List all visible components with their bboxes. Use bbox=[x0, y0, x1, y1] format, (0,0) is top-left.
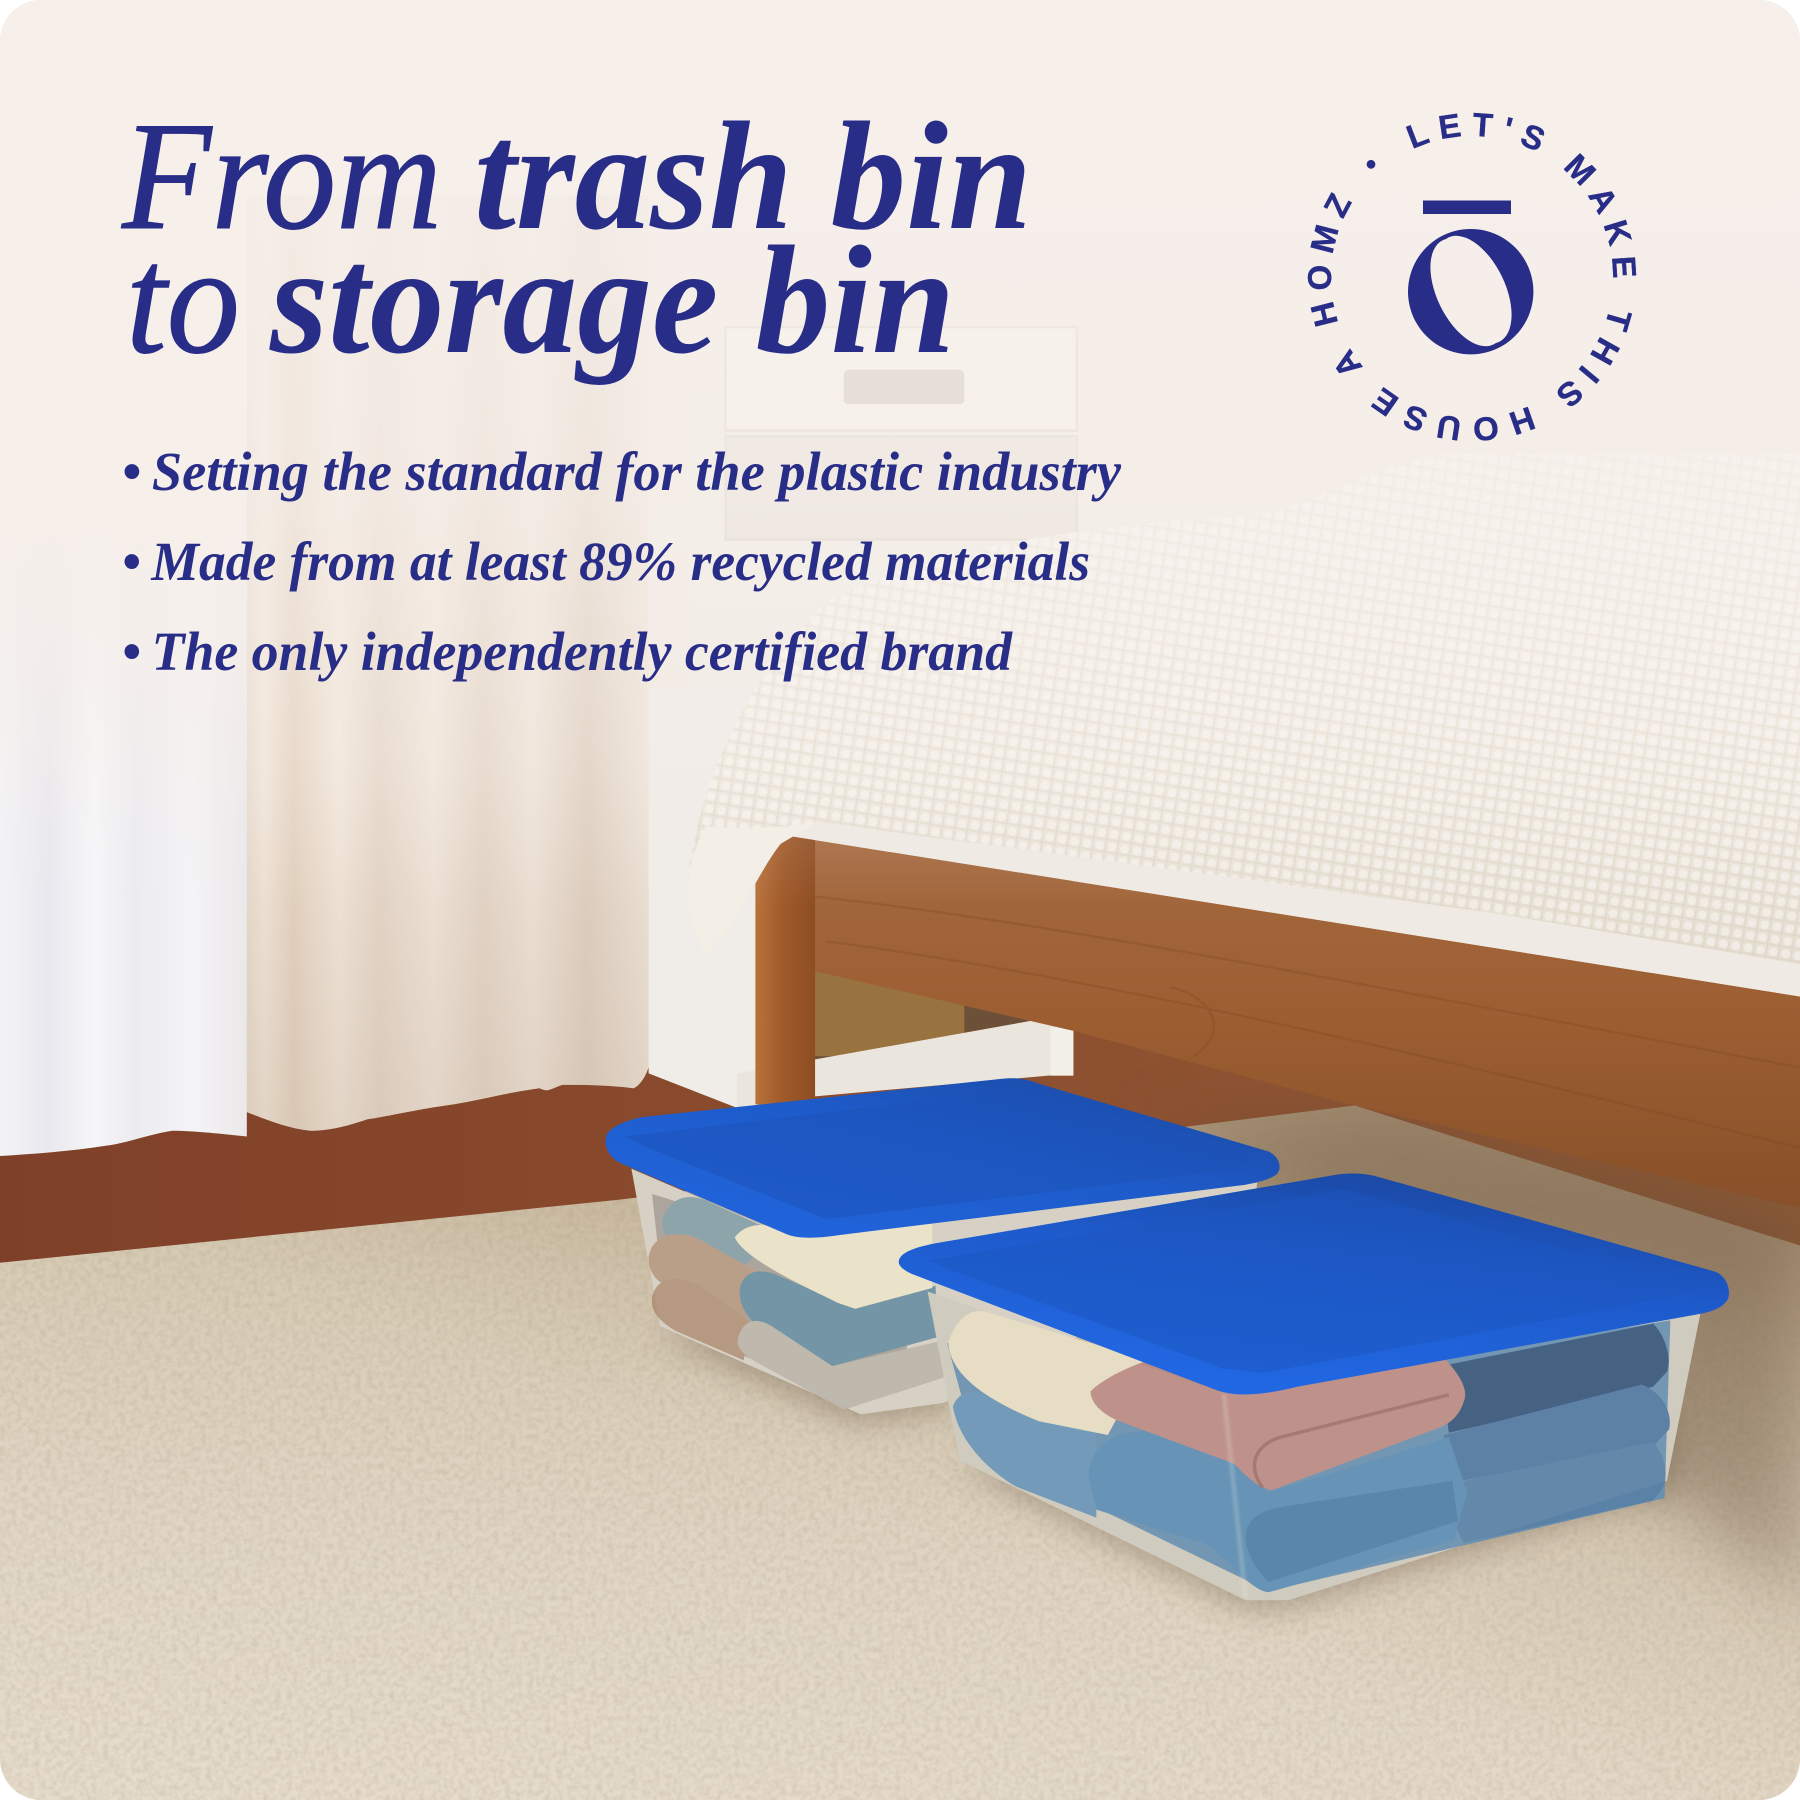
wood floor bbox=[0, 1030, 1800, 1263]
front storage bin bbox=[899, 1173, 1729, 1600]
rear bin frosted front bbox=[740, 1272, 936, 1366]
front bin lid bbox=[899, 1173, 1729, 1394]
main heading: to bbox=[126, 214, 240, 386]
rear bin body bbox=[631, 1169, 1257, 1414]
bullet: plastic industry standard: • Setting the standard for the plastic industry bbox=[122, 441, 1122, 502]
logo mark: macron bar bbox=[1423, 200, 1511, 214]
front bin clothes bbox=[947, 1311, 1670, 1592]
left side fade over sheer curtain bbox=[0, 0, 247, 827]
feature bullet list bbox=[122, 441, 1122, 682]
logo mark: tilted O bbox=[1408, 229, 1533, 354]
knit blanket bbox=[687, 532, 1800, 964]
bullet: certified brand: • The only independently certified brand bbox=[122, 621, 1013, 682]
solid top band bbox=[0, 0, 1800, 195]
bin shadows bbox=[654, 1320, 1676, 1607]
rear bin lid bbox=[606, 1078, 1280, 1238]
top fade overlay bbox=[247, 195, 1800, 878]
main heading: From bbox=[121, 90, 442, 262]
front bin frosted front bbox=[928, 1292, 1701, 1600]
front bin corner highlight bbox=[1224, 1394, 1246, 1598]
bed sheet bbox=[792, 834, 1800, 996]
rear bin clothes bbox=[649, 1194, 944, 1410]
circular slogan: LET'S MAKE THIS HOUSE A HOMZ bbox=[1308, 112, 1636, 441]
rear storage bin bbox=[606, 1078, 1280, 1414]
nightstand bbox=[649, 321, 1077, 1108]
rug bbox=[0, 1102, 1800, 1800]
main heading bbox=[121, 90, 1032, 386]
wall bbox=[648, 480, 1628, 970]
bullet: recycled materials: • Made from at least 89% recycled materials bbox=[122, 531, 1090, 592]
main heading: trash bin bbox=[474, 90, 1032, 262]
white sheer curtain bbox=[0, 621, 247, 1156]
main heading: storage bin bbox=[269, 214, 955, 386]
blanket folded corner bbox=[687, 822, 817, 955]
cream curtain bbox=[246, 327, 648, 1131]
bed frame bbox=[755, 835, 1800, 1208]
front bin body bbox=[928, 1292, 1701, 1600]
shadow under bed bbox=[1148, 1108, 1800, 1607]
slogan separator dot bbox=[1367, 160, 1375, 169]
brand logo badge bbox=[1308, 112, 1636, 441]
